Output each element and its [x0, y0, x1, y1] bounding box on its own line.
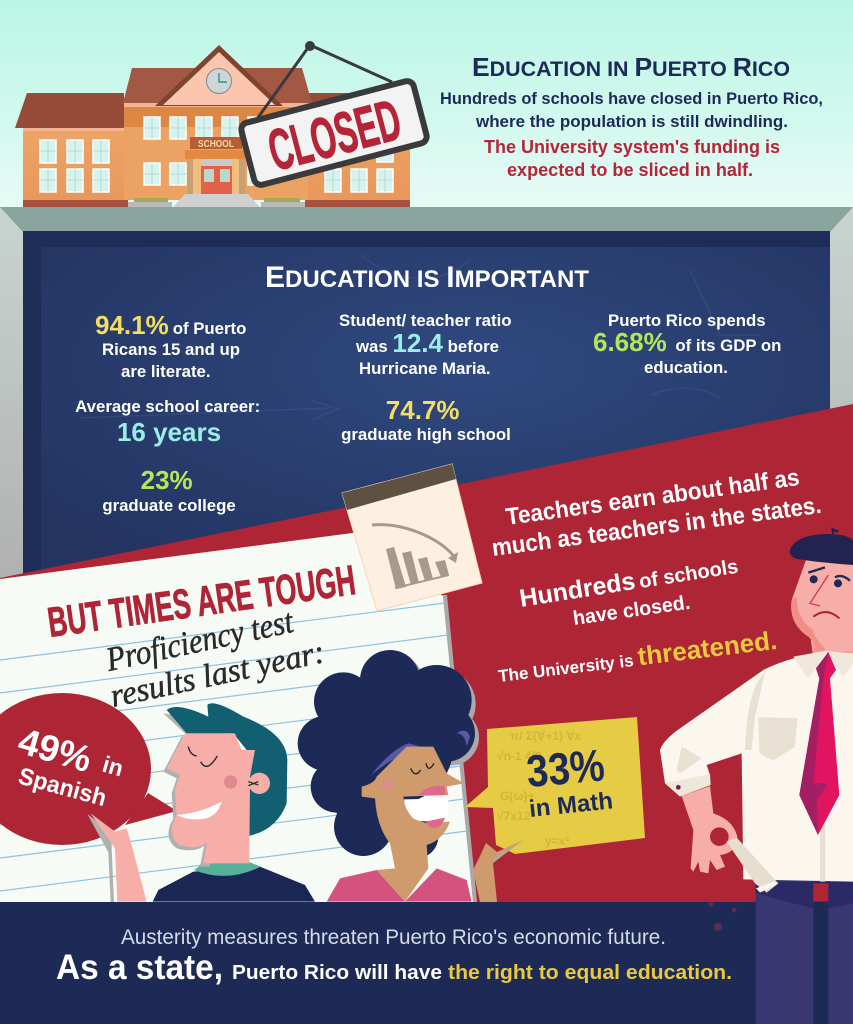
icon: closed sign [240, 41, 429, 189]
falling coins [708, 902, 736, 931]
shirt [153, 867, 315, 902]
hundreds text: Hundredsof schools [518, 551, 740, 613]
shirt [660, 652, 853, 882]
illustration: yellow math speech bubble: √7x12 [497, 809, 531, 823]
hair [364, 654, 479, 766]
stat: student teacher ratio: Hurricane Maria. [359, 359, 491, 378]
illustration: yellow math speech bubble: 33% [524, 739, 607, 797]
handwritten subheading: results last year: [107, 634, 328, 715]
stat: gdp spending: education. [644, 358, 728, 377]
conclusion line two: Puerto Rico will have [232, 962, 442, 984]
title: EDUCATION IN PUERTO RICO [472, 52, 790, 82]
arm shadow [87, 814, 114, 902]
stat: gdp spending: 6.68% [593, 327, 667, 357]
heading: education is important: EDUCATION IS IMPORTANT [265, 261, 589, 294]
sky background [0, 0, 853, 208]
illustration: yellow math speech bubble: π/ Σ(∀+1) ∀x [510, 729, 581, 743]
intro callout in red: expected to be sliced in half. [507, 159, 753, 180]
hair [167, 703, 287, 836]
windows [40, 117, 393, 192]
neck and head [810, 633, 853, 660]
hundreds text: have closed. [572, 592, 692, 630]
pocket [758, 717, 797, 761]
illustration: school building [15, 45, 410, 207]
stat: literacy: Ricans 15 and up [102, 340, 240, 359]
shirt [327, 868, 472, 902]
illustration: worried teacher [660, 529, 853, 1024]
stat: student teacher ratio: Student/ teacher ratio [339, 311, 512, 330]
intro text: Hundreds of schools have closed in Puerto Rico, [440, 90, 823, 108]
tie [799, 652, 839, 835]
panel: chalkboard [23, 231, 830, 591]
school entrance: SCHOOL [198, 139, 234, 150]
stat: high school graduates: 74.7% [386, 395, 460, 425]
stat: literacy: of Puerto [173, 319, 246, 338]
illustration: woman speaking [298, 650, 479, 902]
trousers [756, 880, 853, 1024]
stat: gdp spending: of its GDP on [671, 336, 781, 355]
stat: college graduates: 23% [141, 465, 193, 495]
banner: bottom conclusion [0, 902, 853, 1024]
illustration: woman's raised hand [473, 840, 523, 902]
panel: notebook paper [0, 532, 477, 902]
speech bubble: 49% in Spanish: Spanish [15, 763, 109, 812]
floor ledge [23, 207, 830, 232]
panel: red background [0, 404, 853, 902]
stat: gdp spending: Puerto Rico spends [608, 311, 766, 330]
stat: literacy: are literate. [121, 362, 211, 381]
stat: school career: Average school career: [75, 397, 260, 416]
face [362, 747, 464, 902]
stat: school career: 16 years [117, 417, 221, 447]
stat: high school graduates: graduate high school [341, 425, 511, 444]
hand and arm [91, 813, 147, 902]
school entrance [128, 137, 305, 207]
intro callout in red [484, 136, 780, 180]
clock [206, 68, 232, 94]
stat: literacy: 94.1% [95, 310, 169, 340]
university threatened text: The University is threatened. [496, 625, 779, 688]
illustration: man speaking [87, 703, 315, 902]
illustration: yellow math speech bubble: G(ω)+ [500, 789, 534, 803]
speech bubble: 49% in Spanish: in [100, 751, 126, 781]
stat: college graduates: graduate college [102, 496, 236, 515]
stat: student teacher ratio: was [355, 337, 392, 356]
intro callout in red: The University system's funding is [484, 136, 780, 157]
beret [790, 534, 853, 565]
intro text [440, 90, 823, 131]
speech bubble: 49% in Spanish: 49% [14, 720, 96, 780]
conclusion line two [56, 948, 732, 987]
empty pocket [727, 838, 778, 893]
conclusion line two: the right to equal education. [448, 961, 732, 984]
illustration: yellow math speech bubble [465, 717, 645, 854]
illustration: yellow math speech bubble: y=x² [545, 834, 569, 848]
heading: but times are tough: BUT TIMES ARE TOUGH [45, 556, 358, 646]
stat: student teacher ratio: 12.4 before [392, 328, 499, 358]
teachers earn text: much as teachers in the states. [490, 492, 823, 562]
conclusion line two: As a state, [56, 948, 223, 987]
conclusion line one: Austerity measures threaten Puerto Rico's economic future. [121, 926, 666, 949]
illustration: yellow math speech bubble: √n-1 4/2 [497, 749, 542, 763]
handwritten subheading: Proficiency test [102, 603, 298, 679]
side walls [0, 207, 853, 607]
icon: closed sign: CLOSED [262, 87, 408, 184]
face details [810, 575, 818, 583]
face [167, 733, 255, 863]
chalk scribbles [80, 255, 760, 420]
icon: sticky note with falling chart [342, 464, 482, 611]
teachers earn text: Teachers earn about half as [504, 464, 801, 531]
cuff [665, 774, 711, 797]
illustration: yellow math speech bubble: in Math [528, 787, 614, 823]
arm and hand [682, 786, 737, 873]
head shadow [163, 713, 230, 867]
speech bubble: 49% in Spanish [0, 693, 177, 845]
intro text: where the population is still dwindling. [475, 113, 788, 131]
